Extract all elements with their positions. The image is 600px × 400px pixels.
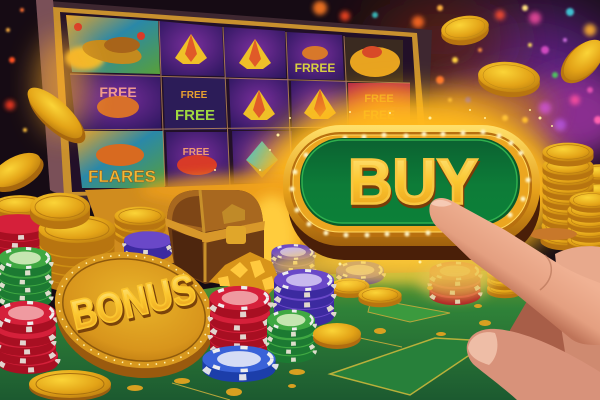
reel cell row 1: FRREE [295,61,335,75]
chip stack: green front [267,310,315,363]
palm [508,290,600,400]
pointing hand [429,198,600,400]
bonus coin [44,238,226,392]
knuckle shading [540,255,551,290]
bonus label: BONUS [66,265,200,339]
reel cell row 2: FREE [363,108,395,122]
button base shadow [288,145,540,260]
reel cell row 2: FREE [175,107,215,124]
button gold rim [283,125,540,246]
chip stack: green left [0,247,51,310]
button green face [300,138,520,226]
chip stack: red front [209,286,271,359]
bonus label: BONUS [68,267,201,341]
bokeh lights [5,1,600,132]
glow over back stacks [265,248,535,300]
treasure chest [165,190,265,284]
thumbnail [468,332,497,365]
thumb [467,329,600,400]
buy label: BUY [348,146,478,218]
reel cell row 2: FREE [364,93,394,105]
buy button [283,125,540,260]
right gold coin stacks [529,143,600,253]
button lights [290,130,530,238]
reel cell row 1 [65,15,403,82]
fingernail [431,200,452,207]
reel cell row 3 [76,131,292,188]
green felt table [0,270,600,400]
buy label: BUY [349,148,479,220]
reel cell row 3: FLARES [88,167,156,186]
reel cell row 3: FREE [183,147,210,158]
gold nuggets [209,252,280,295]
coin front left [29,370,111,400]
screen grid lines [70,21,410,186]
table coins [127,265,523,396]
sparkles [214,109,553,266]
blue chip [202,346,276,382]
reel cell row 2: FREE [181,90,208,101]
slot machine screen [36,0,432,208]
reel cell row 2: FREE [99,84,137,100]
left sparkle glow [36,35,88,135]
chip stacks behind the button [271,244,480,305]
button glow [140,93,565,280]
chip stack: red left [0,301,58,374]
left back stacks [0,193,172,292]
gold coin on table [313,323,361,349]
index finger [429,198,600,345]
reel cell row 2 [70,74,410,130]
second finger behind [555,246,600,300]
gold band under screen [85,182,300,270]
screen frame [36,0,432,208]
chip stack: purple [274,269,334,327]
flying coins [0,13,600,200]
